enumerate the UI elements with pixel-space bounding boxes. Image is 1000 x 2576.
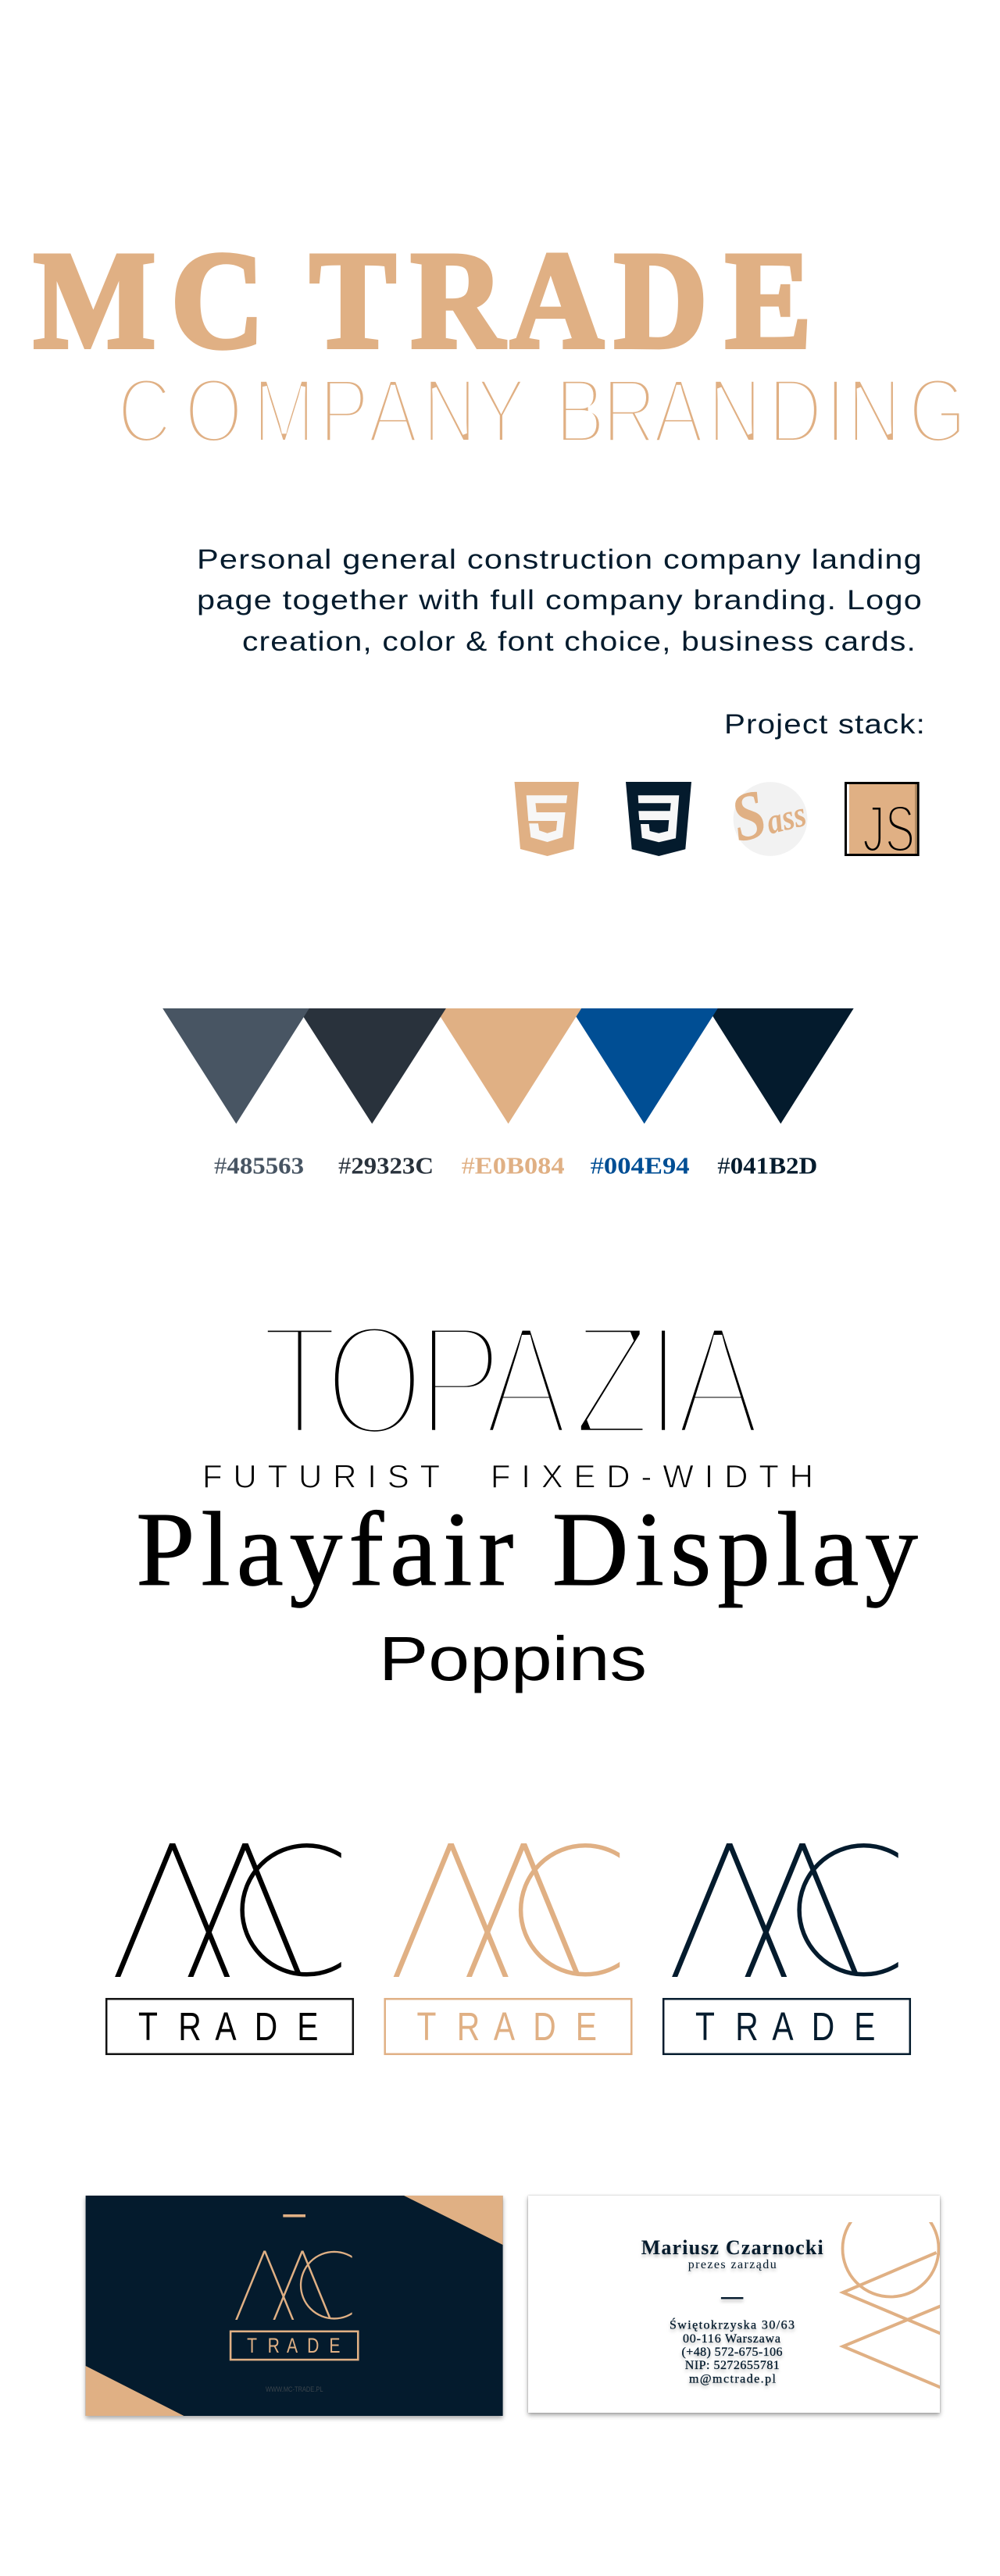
color palette triangles [162, 1008, 854, 1124]
card role: prezes zarządu [688, 2258, 777, 2271]
card contact details [670, 2317, 795, 2386]
icon: javascript [845, 783, 918, 865]
color hex labels: #041B2D [717, 1151, 817, 1179]
project stack label: Project stack: [724, 709, 926, 740]
icon: css3 [626, 782, 691, 856]
font sample: Topazia: TOPAZIA [261, 1291, 761, 1470]
font sample: Poppins: Poppins [379, 1624, 647, 1693]
font sample: Topazia descriptor: FUTURIST FIXED-WIDTH [202, 1457, 813, 1495]
project description [197, 544, 923, 657]
color hex labels: #29323C [338, 1151, 434, 1179]
card contact details: 00-116 Warszawa [683, 2332, 780, 2346]
font sample: Playfair Display: Playfair Display [136, 1491, 918, 1608]
card contact details: (+48) 572-675-106 [681, 2346, 783, 2359]
title: MC TRADE [34, 224, 812, 377]
project description: creation, color & font choice, business cards. [242, 626, 916, 657]
color hex labels: #004E94 [591, 1151, 690, 1179]
card decoration [842, 2201, 941, 2388]
card contact details: m@mctrade.pl [689, 2373, 777, 2386]
project description: page together with full company branding. Logo [197, 585, 923, 615]
icon: javascript: JS [862, 792, 915, 865]
logo: black [106, 1839, 371, 2054]
logo: black: TRADE [138, 2004, 318, 2049]
card website: WWW.MC-TRADE.PL [266, 2385, 323, 2393]
business card: front [86, 2196, 503, 2416]
card name: Mariusz Czarnocki [641, 2236, 823, 2259]
logo: tan [385, 1839, 650, 2054]
card logo [230, 2249, 368, 2360]
business card: back [528, 2196, 941, 2413]
logo: navy [663, 1839, 928, 2054]
logo: tan: TRADE [417, 2004, 597, 2049]
icon: html5 [514, 782, 579, 856]
card logo: TRADE [247, 2335, 340, 2358]
card contact details: NIP: 5272655781 [685, 2359, 780, 2372]
project description: Personal general construction company landing [197, 544, 923, 575]
color hex labels: #485563 [214, 1151, 304, 1179]
card contact details: Świętokrzyska 30/63 [670, 2317, 795, 2332]
icon: sass: Sass [723, 766, 812, 857]
color hex labels: #E0B084 [462, 1151, 565, 1179]
logo: navy: TRADE [695, 2004, 875, 2049]
subtitle: COMPANY BRANDING [117, 359, 967, 462]
color hex labels [214, 1151, 817, 1179]
